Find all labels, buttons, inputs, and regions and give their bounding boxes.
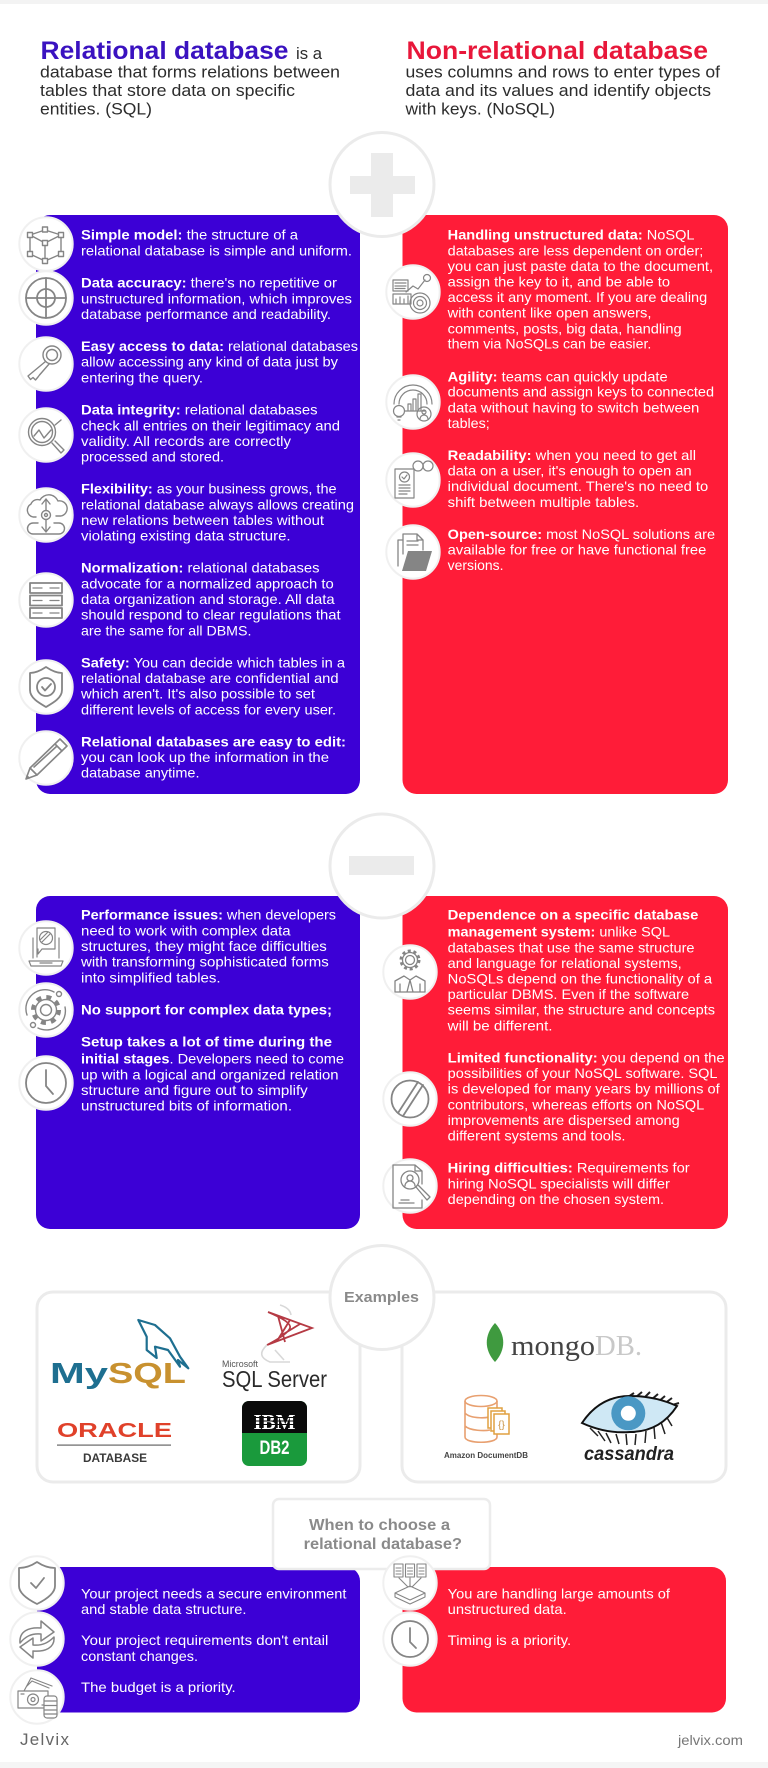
- heading: relational database definition: database that forms relations between: [40, 62, 340, 81]
- text: simple model: [81, 228, 352, 258]
- text: handling unstructured data: you can just paste data to the document,: [448, 259, 713, 274]
- logo: Oracle Database: DATABASE: [83, 1451, 147, 1465]
- panel: relational pros: [19, 215, 360, 794]
- text: performance issues: into simplified tables.: [81, 970, 221, 985]
- text: performance issues: Performance issues: when developers: [81, 908, 336, 923]
- text: normalization: advocate for a normalized approach to: [81, 576, 334, 591]
- logo: MongoDB: [487, 1323, 642, 1362]
- item: hiring difficulties: [383, 1159, 690, 1213]
- text: handling unstructured data: assign the key to it, and be able to: [448, 275, 670, 290]
- icon: gear-headed person: [383, 945, 437, 999]
- icon: laptop with warning: [19, 921, 73, 975]
- logo: MySQL: SQL: [108, 1358, 186, 1390]
- text: handling unstructured data: databases are less dependent on order;: [448, 243, 703, 258]
- text: relational reasons: Your project requirements don't entail: [81, 1633, 328, 1648]
- text: handling unstructured data: access it any moment. If you are dealing: [448, 290, 707, 305]
- text: data integrity: processed and stored.: [81, 449, 224, 464]
- text: dependence on dbms: Dependence on a specific database: [448, 908, 699, 923]
- logo: IBM DB2: IBM: [254, 1410, 296, 1434]
- icon: clock: [19, 1056, 73, 1110]
- text: open-source: available for free or have functional free: [448, 543, 706, 558]
- heading: non-relational database definition: with keys. (NoSQL): [404, 100, 555, 119]
- text: readability: [448, 448, 708, 510]
- text: easy access: [81, 339, 358, 385]
- text: handling unstructured data: them via NoSQLs can be easier.: [448, 337, 651, 352]
- text: non-relational reasons: unstructured data.: [448, 1602, 567, 1617]
- icon: key: [19, 337, 73, 391]
- callout: when to choose: [273, 1499, 490, 1569]
- icon: clouds with arrows: [19, 488, 73, 542]
- text: open-source: Open-source: most NoSQL solutions are: [448, 527, 715, 542]
- text: setup time: unstructured bits of information.: [81, 1099, 292, 1114]
- text: easy to edit: Relational databases are easy to edit:: [81, 734, 346, 749]
- panel: relational cons: [19, 896, 360, 1229]
- text: dependence on dbms: will be different.: [447, 1018, 552, 1033]
- text: dependence on dbms: seems similar, the structure and concepts: [448, 1003, 715, 1018]
- heading: relational database definition: tables that store data on specific: [40, 81, 295, 100]
- text: dependence on dbms: NoSQLs depend on the functionality of a: [448, 971, 713, 986]
- item: data accuracy: [19, 271, 352, 325]
- text: data integrity: Data integrity: relational databases: [81, 403, 318, 418]
- text: no support: No support for complex data types;: [81, 1002, 332, 1017]
- text: easy access: allow accessing any kind of data just by: [81, 355, 338, 370]
- text: flexibility: new relations between tables without: [81, 513, 324, 528]
- text: relational reasons: The budget is a priority.: [81, 1680, 236, 1695]
- icon: agile chart circle: [386, 375, 440, 429]
- logo: MySQL: My: [50, 1358, 108, 1390]
- heading: non-relational database definition: Non-relational database: [406, 37, 708, 65]
- text: open-source: versions.: [448, 558, 504, 573]
- item: easy access: [19, 337, 358, 391]
- icon: analytics report: [386, 265, 440, 319]
- heading: relational database definition: entities. (SQL): [40, 100, 152, 119]
- text: data accuracy: database performance and readability.: [81, 307, 331, 322]
- text: easy to edit: database anytime.: [81, 766, 200, 781]
- logo: Amazon DocumentDB: [444, 1396, 528, 1460]
- item: handling unstructured data: [386, 228, 713, 352]
- text: dependence on dbms: databases that use the same structure: [448, 940, 694, 955]
- text: readability: data on a user, it's enough to open an: [448, 464, 692, 479]
- text: data integrity: check all entries on their legitimacy and: [81, 418, 340, 433]
- icon: money and coins: [10, 1670, 64, 1724]
- text: safety: [80, 655, 345, 717]
- panel: relational examples: [37, 1292, 360, 1482]
- panel: non-relational cons: [383, 896, 728, 1229]
- heading: non-relational database definition: [404, 37, 720, 119]
- text: performance issues: need to work with complex data: [81, 924, 291, 939]
- text: agility: data without having to switch between: [448, 400, 699, 415]
- icon: resume search: [383, 1159, 437, 1213]
- text: safety: which aren't. It's also possible to set: [80, 687, 315, 702]
- text: flexibility: violating existing data structure.: [81, 529, 291, 544]
- text: simple model: Simple model: the structure of a: [81, 228, 298, 243]
- text: hiring difficulties: hiring NoSQL specialists will differ: [448, 1176, 670, 1191]
- text: normalization: data organization and storage. All data: [81, 592, 335, 607]
- heading: relational database definition: [40, 37, 340, 119]
- text: flexibility: Flexibility: as your business grows, the: [81, 482, 337, 497]
- heading: examples circle: Examples: [344, 1290, 419, 1306]
- text: normalization: should respond to clear regulations that: [81, 608, 341, 623]
- text: performance issues: structures, they might face difficulties: [81, 939, 327, 954]
- text: safety: Safety: You can decide which tables in a: [81, 655, 345, 670]
- text: easy access: entering the query.: [81, 370, 203, 385]
- item: normalization: [19, 561, 341, 638]
- text: open-source: [448, 527, 715, 573]
- item: performance issues: [19, 908, 336, 985]
- text: setup time: [81, 1035, 344, 1114]
- item: setup time: [19, 1035, 344, 1114]
- heading: examples circle: [330, 1246, 434, 1350]
- logo: Microsoft SQL Server: [222, 1305, 327, 1392]
- item: safety: [19, 655, 345, 717]
- brand: jelvix.com: jelvix.com: [677, 1732, 743, 1748]
- text: relational reasons: Your project needs a secure environment: [81, 1586, 347, 1601]
- text: easy to edit: [81, 734, 346, 781]
- panel: choose non-relational: [402, 1567, 726, 1712]
- text: setup time: Setup takes a lot of time during the: [81, 1035, 332, 1050]
- text: limited functionality: possibilities of your NoSQL software. SQL: [448, 1066, 718, 1081]
- item: open-source: [386, 525, 715, 579]
- panel: non-relational pros: [386, 215, 728, 794]
- text: relational reasons: [81, 1586, 347, 1695]
- text: safety: relational database are confidential and: [81, 671, 339, 686]
- panel: choose relational: [10, 1556, 360, 1724]
- item: easy to edit: [19, 731, 346, 785]
- text: dependence on dbms: [447, 908, 715, 1033]
- logo: MySQL: [50, 1320, 188, 1390]
- icon: pencil: [19, 731, 73, 785]
- icon: cube network: [19, 217, 73, 271]
- panel: non-relational examples: [402, 1292, 726, 1482]
- item: readability: [386, 448, 708, 510]
- text: non-relational reasons: Timing is a priority.: [448, 1633, 571, 1648]
- icon: documents into box: [383, 1556, 437, 1610]
- item: no support: [19, 983, 332, 1037]
- item: limited functionality: [383, 1050, 725, 1144]
- logo: Microsoft SQL Server: Microsoft: [222, 1359, 258, 1369]
- icon: plus circle: [330, 132, 434, 236]
- logo: Cassandra: [582, 1392, 679, 1465]
- text: agility: tables;: [448, 416, 490, 431]
- logo: Microsoft SQL Server: SQL Server: [222, 1366, 327, 1392]
- text: easy access: Easy access to data: relational databases: [81, 339, 358, 354]
- icon: shield check: [10, 1556, 64, 1610]
- text: normalization: Normalization: relational databases: [81, 561, 320, 576]
- text: limited functionality: is developed for many years by millions of: [448, 1082, 720, 1097]
- text: setup time: initial stages . Developers need to come: [81, 1052, 344, 1067]
- text: hiring difficulties: Hiring difficulties: Requirements for: [448, 1161, 690, 1176]
- text: data integrity: validity. All records are correctly: [81, 434, 291, 449]
- logo: MongoDB: mongo: [511, 1331, 595, 1362]
- item: dependence on dbms: [383, 908, 715, 1033]
- item: simple model: [19, 217, 352, 271]
- text: readability: shift between multiple tables.: [448, 495, 639, 510]
- text: hiring difficulties: [448, 1161, 690, 1207]
- brand: Jelvix logo: Jelvix: [20, 1730, 70, 1749]
- text: dependence on dbms: and language for relational systems,: [448, 956, 682, 971]
- logo: Oracle Database: ORACLE: [57, 1420, 172, 1442]
- text: safety: different levels of access for every user.: [81, 702, 336, 717]
- text: data integrity: [81, 403, 340, 464]
- logo: Amazon DocumentDB: {}: [498, 1420, 505, 1431]
- logo: Oracle Database: [57, 1420, 172, 1465]
- text: handling unstructured data: comments, posts, big data, handling: [448, 321, 682, 336]
- icon: clock: [383, 1612, 437, 1666]
- text: readability: individual document. There's no need to: [448, 479, 708, 494]
- item: flexibility: [19, 482, 354, 544]
- icon: target: [19, 271, 73, 325]
- text: relational reasons: and stable data structure.: [81, 1602, 246, 1617]
- heading: relational database definition: is a: [296, 44, 323, 63]
- text: readability: Readability: when you need to get all: [448, 448, 696, 463]
- icon: gear: [19, 983, 73, 1037]
- icon: shield check: [19, 660, 73, 714]
- icon: server stack: [19, 573, 73, 627]
- icon: document with glasses: [386, 453, 440, 507]
- logo: IBM DB2: DB2: [260, 1438, 290, 1459]
- text: normalization: are the same for all DBMS.: [81, 623, 251, 638]
- text: normalization: [81, 561, 341, 638]
- text: agility: [448, 369, 714, 431]
- text: non-relational reasons: [448, 1586, 670, 1648]
- text: limited functionality: different systems and tools.: [448, 1129, 626, 1144]
- text: non-relational reasons: You are handling large amounts of: [448, 1586, 670, 1601]
- item: data integrity: [19, 403, 340, 464]
- heading: relational database definition: Relational database: [40, 37, 289, 65]
- text: setup time: structure and figure out to simplify: [81, 1083, 308, 1098]
- text: handling unstructured data: [447, 228, 713, 352]
- item: agility: [386, 369, 714, 431]
- icon: folder with documents: [386, 525, 440, 579]
- text: setup time: up with a logical and organized relation: [81, 1067, 339, 1082]
- text: data accuracy: unstructured information, which improves: [81, 291, 352, 306]
- icon: magnifier with chart: [19, 408, 73, 462]
- callout: when to choose: When to choose a: [309, 1517, 450, 1534]
- logo: Cassandra: cassandra: [584, 1444, 674, 1465]
- text: limited functionality: contributors, whereas efforts on NoSQL: [448, 1097, 705, 1112]
- text: limited functionality: Limited functionality: you depend on the: [448, 1050, 725, 1065]
- text: agility: Agility: teams can quickly update: [448, 369, 668, 384]
- logo: MongoDB: DB.: [595, 1331, 642, 1362]
- text: dependence on dbms: particular DBMS. Even if the software: [448, 987, 689, 1002]
- text: data accuracy: [81, 276, 352, 322]
- text: agility: documents and assign keys to connected: [448, 385, 714, 400]
- heading: non-relational database definition: data and its values and identify objects: [406, 81, 711, 100]
- text: performance issues: [80, 908, 336, 985]
- text: simple model: relational database is simple and uniform.: [81, 243, 352, 258]
- text: handling unstructured data: with content like open answers,: [447, 306, 651, 321]
- heading: non-relational database definition: uses columns and rows to enter types of: [406, 62, 720, 81]
- callout: when to choose: relational database?: [304, 1536, 462, 1553]
- text: handling unstructured data: Handling unstructured data: NoSQL: [448, 228, 695, 243]
- icon: prohibition sign: [383, 1072, 437, 1126]
- text: dependence on dbms: management system: unlike SQL: [448, 925, 670, 940]
- text: limited functionality: improvements are dispersed among: [448, 1113, 680, 1128]
- text: relational reasons: constant changes.: [81, 1649, 198, 1664]
- icon: sync arrows: [10, 1612, 64, 1666]
- text: flexibility: relational database always allows creating: [81, 497, 354, 512]
- icon: minus circle: [330, 814, 434, 918]
- text: flexibility: [81, 482, 354, 544]
- text: easy to edit: you can look up the information in the: [81, 750, 329, 765]
- text: performance issues: with transforming sophisticated forms: [80, 955, 329, 970]
- logo: Amazon DocumentDB: Amazon DocumentDB: [444, 1450, 528, 1460]
- text: hiring difficulties: depending on the chosen system.: [448, 1192, 664, 1207]
- text: data accuracy: Data accuracy: there's no repetitive or: [81, 276, 338, 291]
- logo: IBM DB2: [242, 1401, 307, 1466]
- text: limited functionality: [448, 1050, 725, 1144]
